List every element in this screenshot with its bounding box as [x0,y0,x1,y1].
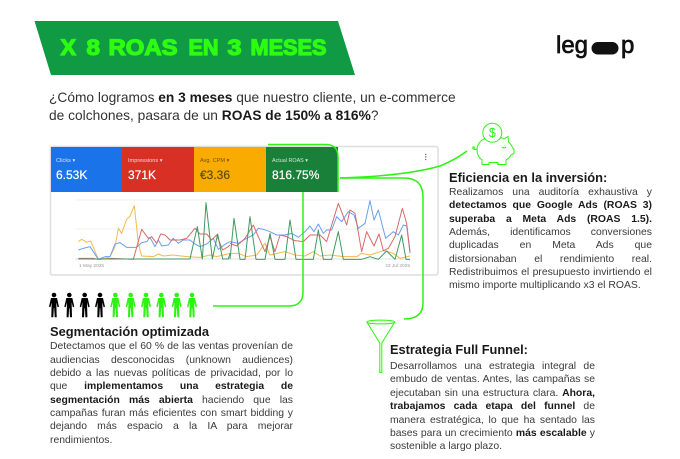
text block: eficiencia en la inversión [449,170,652,291]
metric tile: impressions: Impressions ▾ [128,158,163,164]
title banner: MESES [250,35,326,60]
intro question: ¿Cómo logramos en 3 meses que nuestro cliente, un e-commerce [49,90,456,104]
text block: estrategia full funnel: ejecutaban sin una estructura clara. Ahora, [390,388,595,399]
chart date labels: 1 May 2025 [79,263,104,269]
intro question [49,90,456,123]
text block: eficiencia en la inversión: Además, identificamos conversiones [449,227,652,238]
series: orange [78,206,410,259]
text block: segmentación optimizada [50,324,293,446]
text block: segmentación optimizada: rendimientos. [50,434,112,446]
text block: estrategia full funnel [390,342,595,452]
title banner: EN [188,35,218,60]
metric tile: actual ROAS: Actual ROAS ▾ [272,158,308,164]
logo: legoop: p [621,32,634,59]
icon: menu dots [425,154,426,160]
text block: estrategia full funnel: embudo de ventas. Antes, las campañas se [390,374,595,385]
intro question: de colchones, pasara de un ROAS de 150% a 816%? [49,108,378,123]
text block: eficiencia en la inversión: detectamos que Google Ads (ROAS 3) [449,200,652,211]
title banner: 3 [228,35,242,60]
chart date labels: 23 Jul 2025 [385,263,410,269]
text block: eficiencia en la inversión: mismo importe multiplicando x3 el ROAS. [449,280,641,291]
title banner: X [60,35,76,60]
text block: eficiencia en la inversión: distorsionaban el rendimiento real. [449,254,652,265]
text block: segmentación optimizada: Segmentación optimizada [50,324,209,339]
metric tile: clicks: Clicks ▾ [56,158,75,164]
text block: estrategia full funnel: trabajamos cada etapa del funnel de [390,401,595,412]
black people [49,293,105,317]
connector: ROAS tile outline to segmentation [213,144,338,306]
text block: estrategia full funnel: Desarrollamos una estrategia integral de [390,361,595,372]
series: blue [78,201,410,259]
icon: piggy bank [473,123,514,164]
text block: segmentación optimizada: Detectamos que el 60 % de las ventas provenían de [50,341,293,352]
title banner: ROAS [108,35,178,60]
icon: funnel [367,320,395,372]
logo: legoop [556,32,634,59]
connector: ROAS tile to piggy bank [340,151,467,178]
text block: eficiencia en la inversión: Redistribuimos el presupuesto invirtiendo el [449,267,652,278]
metric tile: impressions [122,147,194,192]
text block: segmentación optimizada: dejando más espacio a la IA para mejorar [50,421,293,432]
metric tile: actual ROAS: 816.75% [272,168,320,182]
green people [110,293,197,317]
text block: eficiencia en la inversión: Realizamos una auditoría exhaustiva y [449,187,652,198]
icon: ten people [49,293,197,317]
metric tile: average CPM: €3.36 [200,168,230,182]
connector: ROAS tile to funnel [340,178,423,319]
text block: estrategia full funnel: manera estratégica, lo que ha sentado las [390,414,595,426]
metric tile: clicks [51,147,122,192]
text block: segmentación optimizada: que implementamos una estrategia de [50,381,293,392]
panel: dashboard [50,146,438,275]
text block: segmentación optimizada: campañas furan más eficientes con smart bidding y [50,408,293,419]
text block: eficiencia en la inversión: duplicadas en Meta Ads que [449,240,652,251]
title banner [34,21,355,75]
series: green [78,203,410,259]
text block: estrategia full funnel: bases para un crecimiento más escalable y [390,428,595,439]
logo: legoop: leg [556,32,588,59]
metric tile: average CPM: Avg. CPM ▾ [200,158,230,164]
icon: piggy bank: $ [489,126,496,140]
metric tile: impressions: 371K [128,168,156,182]
text block: segmentación optimizada: segmentación más abierta haciendo que las [50,394,293,406]
chart date labels [79,263,410,269]
metric tile: clicks: 6.53K [56,168,87,182]
text block: eficiencia en la inversión: Eficiencia en la inversión: [449,170,607,185]
text block: segmentación optimizada: debido a las nuevas políticas de privacidad, por lo [50,368,293,379]
metric tile: actual ROAS [266,147,338,192]
series: red [78,203,410,259]
text block: estrategia full funnel: sostenible a largo plazo. [390,441,502,452]
line chart [75,200,410,259]
title banner: 8 [86,35,100,60]
text block: estrategia full funnel: Estrategia Full Funnel: [390,342,528,357]
text block: eficiencia en la inversión: superaba a Meta Ads (ROAS 1.5). [449,214,652,225]
metric tile: average CPM [194,147,266,192]
text block: segmentación optimizada: audiencias desconocidas (unknown audiences) [50,354,293,366]
